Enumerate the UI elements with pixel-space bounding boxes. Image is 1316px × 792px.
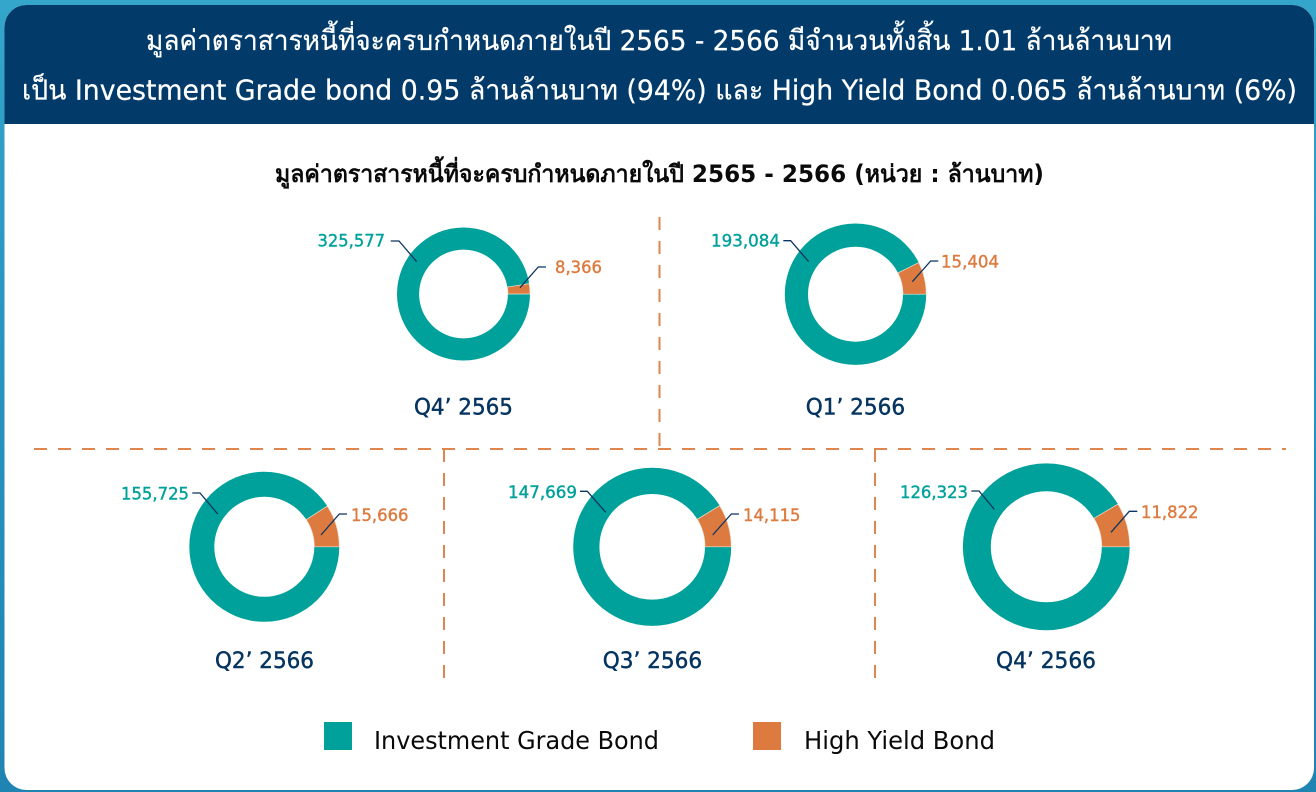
legend	[324, 722, 995, 755]
donut chart: Q2 2566: Q2’ 2566	[215, 649, 314, 674]
donut chart: Q4 2565: 325,577	[318, 232, 385, 250]
donut chart: Q1 2566	[711, 224, 999, 420]
donut chart: Q3 2566: Q3’ 2566	[603, 649, 702, 674]
dashed quadrant dividers	[34, 217, 1286, 680]
legend label: High Yield Bond: High Yield Bond	[804, 726, 995, 755]
donut chart: Q3 2566: 14,115	[743, 506, 800, 525]
donut chart: Q4 2566: Q4’ 2566	[996, 649, 1096, 674]
legend swatch: Investment Grade Bond	[324, 722, 352, 750]
donut chart: Q2 2566	[121, 472, 408, 674]
donut chart: Q4 2565	[318, 228, 602, 420]
donut chart: Q4 2565: Q4’ 2565	[414, 396, 513, 420]
donut chart: Q3 2566	[508, 468, 800, 674]
legend swatch: High Yield Bond	[753, 722, 781, 750]
legend label: Investment Grade Bond: Investment Grade Bond	[374, 726, 659, 755]
donut chart: Q1 2566: 15,404	[941, 252, 999, 272]
donut chart: Q1 2566: 193,084	[711, 232, 780, 250]
donut chart: Q4 2566: 126,323	[900, 483, 968, 502]
donut chart: Q2 2566: 15,666	[351, 506, 408, 525]
panel: header banner	[4, 5, 1315, 124]
donut chart: Q3 2566: 147,669	[508, 483, 577, 502]
donut chart: Q1 2566: Q1’ 2566	[806, 396, 905, 420]
donut chart: Q4 2566: 11,822	[1141, 503, 1198, 522]
heading: banner text: มูลค่าตราสารหนี้ที่จะครบกำหนดภายในปี 2565 - 2566 มีจำนวนทั้งสิ้น 1.01 ล้านล้านบาท	[146, 20, 1172, 58]
donut chart: Q4 2565: 8,366	[555, 258, 602, 277]
donut chart: Q2 2566: 155,725	[121, 484, 189, 504]
heading: chart section title: มูลค่าตราสารหนี้ที่จะครบกำหนดภายในปี 2565 - 2566 (หน่วย : ล้านบาท)	[275, 155, 1044, 189]
donut chart: Q4 2566	[900, 463, 1198, 674]
heading: banner text	[22, 20, 1297, 106]
